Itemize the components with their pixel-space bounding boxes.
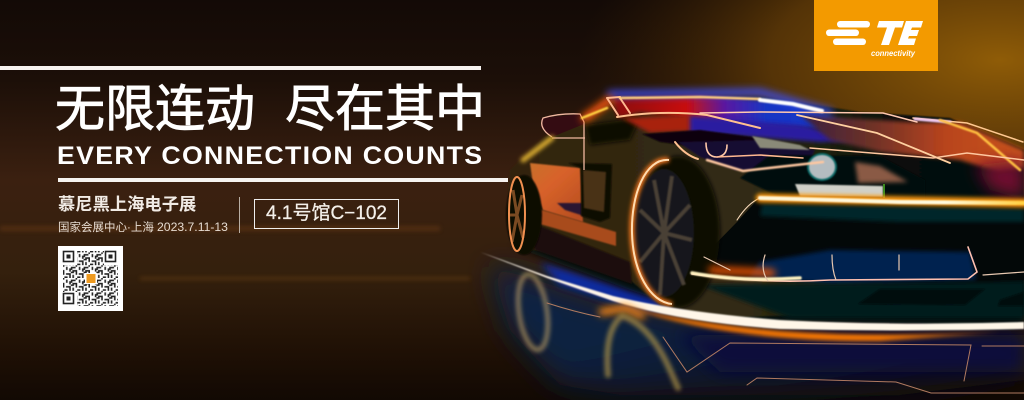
top rule — [0, 66, 481, 70]
side door reflection — [530, 163, 583, 222]
shoulder yellow glow — [523, 138, 552, 160]
red cowl — [622, 115, 730, 133]
fog light trim — [883, 184, 885, 198]
title: English: EVERY CONNECTION COUNTS — [57, 142, 483, 170]
lower flare glow — [712, 270, 772, 273]
rim light glow — [632, 160, 672, 304]
right intake — [998, 292, 1024, 306]
lower rule — [58, 178, 508, 182]
side vent — [568, 163, 612, 222]
blue glow above road streak — [540, 262, 700, 312]
mirror — [541, 114, 585, 170]
upper bumper core — [760, 198, 1024, 203]
booth number box: 4.1号馆C−102 — [266, 203, 387, 224]
right road navy — [680, 335, 1024, 372]
lower flare core — [692, 273, 800, 279]
hood — [800, 115, 1024, 172]
shoulder shadow — [585, 118, 640, 145]
lower grille — [750, 250, 976, 284]
booth number box — [254, 199, 399, 229]
windshield lower band — [690, 116, 870, 142]
eye ring — [706, 143, 727, 157]
bumper ticks — [704, 255, 1024, 281]
front fascia — [690, 197, 1024, 285]
eye lid line — [675, 142, 698, 159]
mid hood line — [810, 148, 1024, 160]
venue and date: 国家会展中心·上海 2023.7.11-13 — [58, 220, 228, 234]
lower air intake — [858, 289, 985, 305]
bumper corner — [737, 198, 760, 220]
rear rim spokes — [510, 190, 523, 242]
hood highlight glint — [915, 119, 950, 122]
sill light band — [535, 208, 616, 246]
car body — [508, 96, 1024, 318]
logo mark: connectivity — [871, 49, 916, 58]
black strip below windshield — [642, 130, 800, 150]
vent inner — [583, 170, 606, 212]
roof line — [620, 97, 760, 99]
lower sill — [530, 222, 632, 284]
rim — [634, 169, 694, 297]
gray hood streak — [752, 136, 810, 150]
headlight lower line — [707, 160, 823, 171]
eye line — [717, 155, 803, 158]
windshield — [612, 96, 880, 130]
right hood glow — [975, 160, 1024, 200]
chin — [700, 282, 1024, 318]
title: Chinese: 无限连动 尽在其中 — [55, 69, 485, 141]
rear tyre — [506, 175, 542, 255]
road reflection — [490, 265, 1024, 395]
headlight — [807, 153, 837, 181]
logo: TE connectivity — [814, 0, 938, 71]
event name: 慕尼黑上海电子展 — [58, 194, 196, 214]
reflection flare — [602, 308, 642, 316]
a-pillars — [607, 97, 630, 115]
lower bumper line — [692, 247, 977, 281]
upper bumper glow — [760, 198, 1024, 203]
windshield base line — [617, 113, 760, 128]
headlight cluster dark — [740, 155, 925, 200]
pillar highlight — [582, 108, 607, 118]
pillar red glow — [585, 100, 610, 118]
rim light — [632, 160, 672, 304]
headlight lens — [809, 155, 835, 179]
rear wheel — [506, 175, 542, 255]
orange lens — [855, 162, 908, 183]
road light core — [480, 252, 1024, 330]
roof blue glow — [610, 92, 830, 112]
reflection outline — [547, 303, 1024, 393]
teal band — [760, 204, 1024, 222]
eye recess — [678, 140, 815, 170]
rear rim light — [509, 177, 525, 251]
reflection rear wheel — [514, 272, 552, 352]
reflection front wheel — [607, 316, 678, 388]
mirror outline — [542, 114, 585, 170]
upper crease — [700, 112, 917, 122]
body shadow under car — [510, 245, 1024, 325]
QR modules — [62, 250, 118, 306]
headlight ring — [807, 153, 837, 181]
logo mark — [826, 21, 923, 58]
sports car — [480, 92, 1024, 395]
tyre — [636, 156, 720, 308]
fog light panel — [795, 184, 883, 197]
spokes — [640, 176, 692, 295]
divider — [238, 197, 240, 233]
hood top line — [913, 118, 1023, 142]
door shadow — [557, 203, 584, 216]
yellow hood line — [940, 120, 1020, 170]
road light glow — [620, 304, 1000, 341]
roof highlight — [760, 100, 822, 111]
hood crease — [797, 115, 950, 163]
mirror housing — [541, 114, 584, 137]
front wheel — [632, 156, 720, 308]
glowing outline strokes — [480, 92, 1024, 393]
QR code — [58, 246, 123, 311]
